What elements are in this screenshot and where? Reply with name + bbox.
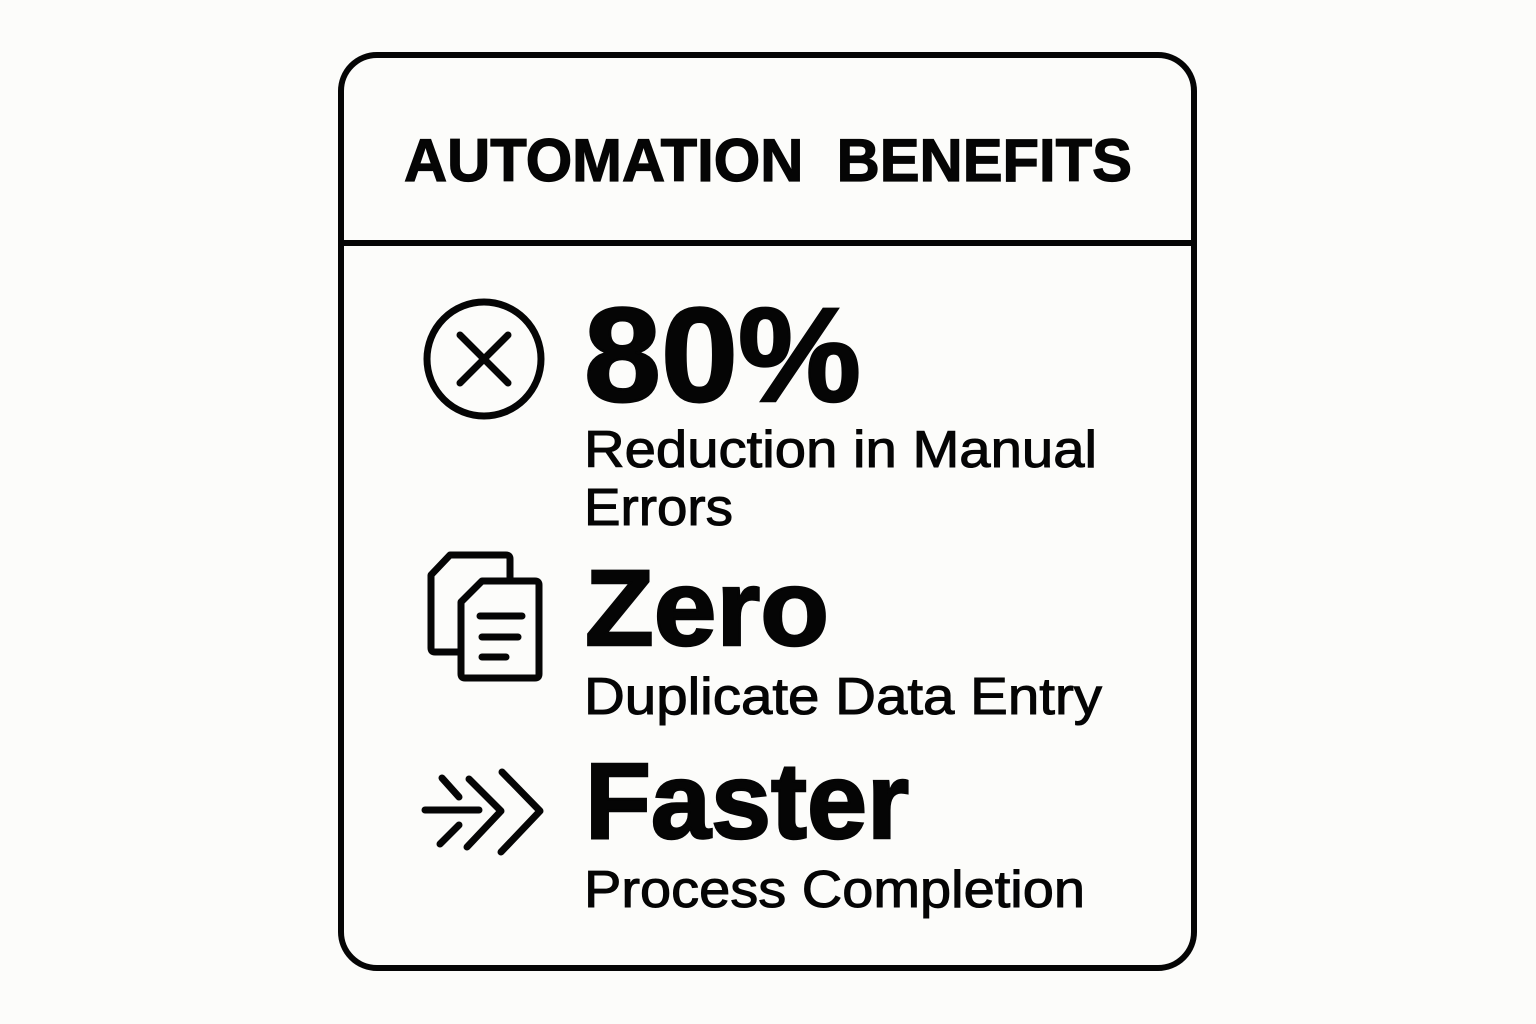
description: reduction in manual errors: Reduction in Manual (584, 421, 1097, 479)
title: AUTOMATION BENEFITS (404, 127, 1132, 194)
stat: 80%: 80% (584, 281, 861, 430)
icon: duplicate documents (431, 555, 539, 678)
description: reduction in manual errors (584, 421, 1097, 537)
description: duplicate data entry: Duplicate Data Entry (584, 668, 1102, 726)
stat: Zero: Zero (585, 547, 829, 668)
stat: Faster: Faster (585, 740, 909, 861)
description: process completion: Process Completion (584, 861, 1085, 919)
description: reduction in manual errors: Errors (584, 479, 733, 537)
benefit: zero duplicate data entry (431, 547, 1102, 726)
icon: fast forward arrows (425, 772, 540, 852)
benefit: 80% reduction in manual errors (427, 281, 1097, 537)
icon: circled x (427, 302, 541, 416)
card panel (341, 55, 1194, 968)
benefit: faster process completion (425, 740, 1085, 919)
